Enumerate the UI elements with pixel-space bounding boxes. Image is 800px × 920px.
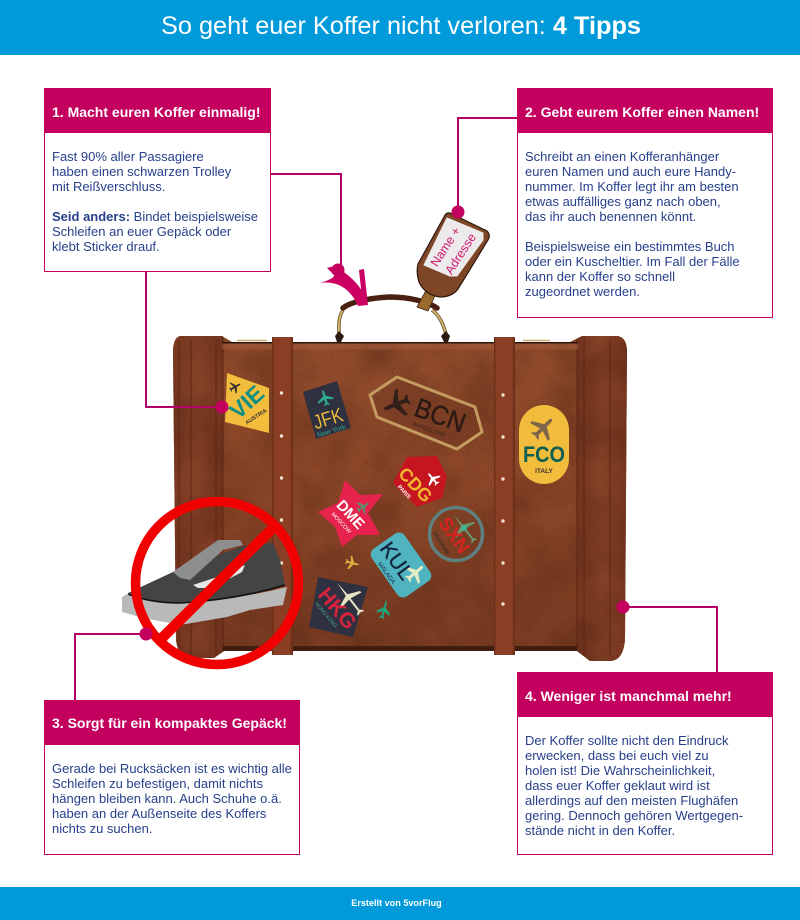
luggage tag with ribbon: Name + [428, 225, 464, 269]
text: tip 3 [52, 761, 292, 836]
panel: tip 4 [517, 672, 773, 855]
luggage tag with ribbon: Adresse [442, 231, 479, 277]
small plane: yellow [344, 555, 360, 571]
sticker: JFK [303, 381, 351, 439]
heading: tip 1: 1. Macht euren Koffer einmalig! [52, 104, 260, 120]
sticker: FCO: ITALY [535, 468, 554, 475]
text: tip 3: nichts zu suchen. [52, 821, 152, 836]
sticker: KUL: KUL [375, 538, 418, 584]
text: tip 4: gering. Dennoch gehören Wertgegen- [525, 808, 743, 823]
text: tip 2 [525, 149, 740, 299]
text: tip 2: euren Namen und auch eure Handy- [525, 164, 736, 179]
sticker: CDG: CDG [394, 463, 436, 506]
text: tip 4: stände nicht in den Koffer. [525, 823, 675, 838]
sticker: CDG: PARIS [396, 484, 412, 501]
heading: tip 3: 3. Sorgt für ein kompaktes Gepäck! [52, 715, 287, 731]
sticker: SXN: SINGAPORE [432, 531, 450, 556]
text: tip 1 [52, 149, 258, 254]
text: tip 2: Beispielsweise ein bestimmtes Buch [525, 239, 735, 254]
title bar [0, 0, 800, 55]
sticker: KUL [368, 530, 434, 600]
footer bar [0, 887, 800, 920]
text: tip 4: holen ist! Die Wahrscheinlichkeit, [525, 763, 715, 778]
sticker: BCN: BARCELONA [411, 421, 446, 439]
text: tip 3: hängen bleiben kann. Auch Schuhe o.ä. [52, 791, 282, 806]
heading: tip 4: 4. Weniger ist manchmal mehr! [525, 688, 732, 704]
text: tip 3: Gerade bei Rucksäcken ist es wichtig alle [52, 761, 292, 776]
ribbon [320, 265, 368, 306]
suitcase body [170, 334, 630, 664]
heading: tip 4 [517, 672, 773, 717]
panel: tip 3 [44, 700, 300, 855]
rivets [280, 391, 505, 606]
sticker: JFK: New York [316, 424, 347, 439]
connector lines [75, 118, 717, 700]
prohibition sign [136, 502, 298, 664]
text: tip 1: Schleifen an euer Gepäck oder [52, 224, 231, 239]
text: tip 1: klebt Sticker drauf. [52, 239, 160, 254]
text: tip 4: Der Koffer sollte nicht den Eindruck [525, 733, 729, 748]
connector dots [140, 206, 630, 640]
small plane: green [375, 599, 393, 620]
sticker: BCN [370, 377, 482, 449]
text: tip 2: Schreibt an einen Kofferanhänger [525, 149, 719, 164]
text: tip 2: nummer. Im Koffer legt ihr am besten [525, 179, 739, 194]
text: tip 1: Fast 90% aller Passagiere [52, 149, 204, 164]
sticker: CDG [393, 456, 447, 507]
text: tip 3: Schleifen zu befestigen, damit nichts [52, 776, 263, 791]
heading: tip 2: 2. Gebt eurem Koffer einen Namen! [525, 104, 759, 120]
panel: tip 2 [517, 88, 773, 318]
handle [335, 297, 450, 342]
heading: tip 2 [517, 88, 773, 133]
heading: tip 3 [44, 700, 300, 745]
sticker: DME: MOSCOW [330, 512, 352, 535]
text: tip 1: Seid anders: Bindet beispielsweise [52, 209, 258, 224]
heading: tip 1 [44, 88, 271, 133]
footer bar: Erstellt von 5vorFlug [351, 898, 442, 908]
sticker: HKG: HKG [313, 584, 361, 634]
sticker: VIE: AUSTRIA [245, 408, 268, 426]
sticker: FCO: FCO [523, 442, 565, 467]
tag strap [417, 283, 439, 311]
sticker: DME: DME [333, 497, 368, 533]
text: tip 4: erwecken, dass bei euch viel zu [525, 748, 709, 763]
sticker: VIE: VIE [224, 380, 269, 424]
title bar: So geht euer Koffer nicht verloren: 4 Tipps [161, 12, 641, 40]
text: tip 2: kann der Koffer so schnell [525, 269, 675, 284]
suitcase [170, 297, 630, 664]
sticker: HKG [309, 575, 371, 637]
sticker: JFK: JFK [311, 404, 346, 434]
text: tip 2: oder ein Kuscheltier. Im Fall der Fälle [525, 254, 740, 269]
text: tip 1: mit Reißverschluss. [52, 179, 165, 194]
text: tip 4: allerdings auf den meisten Flughäfen [525, 793, 738, 808]
text: tip 2: das ihr auch benennen könnt. [525, 209, 696, 224]
text: tip 2: etwas auffälliges ganz nach oben, [525, 194, 721, 209]
sticker: BCN: BCN [411, 393, 470, 439]
shoe with prohibition sign [122, 502, 298, 664]
shoe [122, 540, 287, 625]
sticker: SXN: SXN [434, 514, 473, 558]
text: tip 2: zugeordnet werden. [525, 284, 640, 299]
sticker: FCO [519, 405, 569, 484]
text: tip 4: dass euer Koffer geklaut wird ist [525, 778, 710, 793]
text: tip 3: haben an der Außenseite des Koffers [52, 806, 266, 821]
luggage tag with ribbon [320, 213, 489, 311]
illustration: suitcase, stickers, connectors [74, 117, 718, 700]
text: tip 1: haben einen schwarzen Trolley [52, 164, 231, 179]
tag [417, 213, 489, 297]
sticker: SXN [430, 507, 484, 560]
panel: tip 1 [44, 88, 271, 272]
text: tip 4 [525, 733, 743, 838]
sticker: KUL: MALAGA [376, 562, 396, 585]
sticker: HKG: HONG KONG [313, 602, 338, 629]
sticker: DME [318, 480, 383, 547]
